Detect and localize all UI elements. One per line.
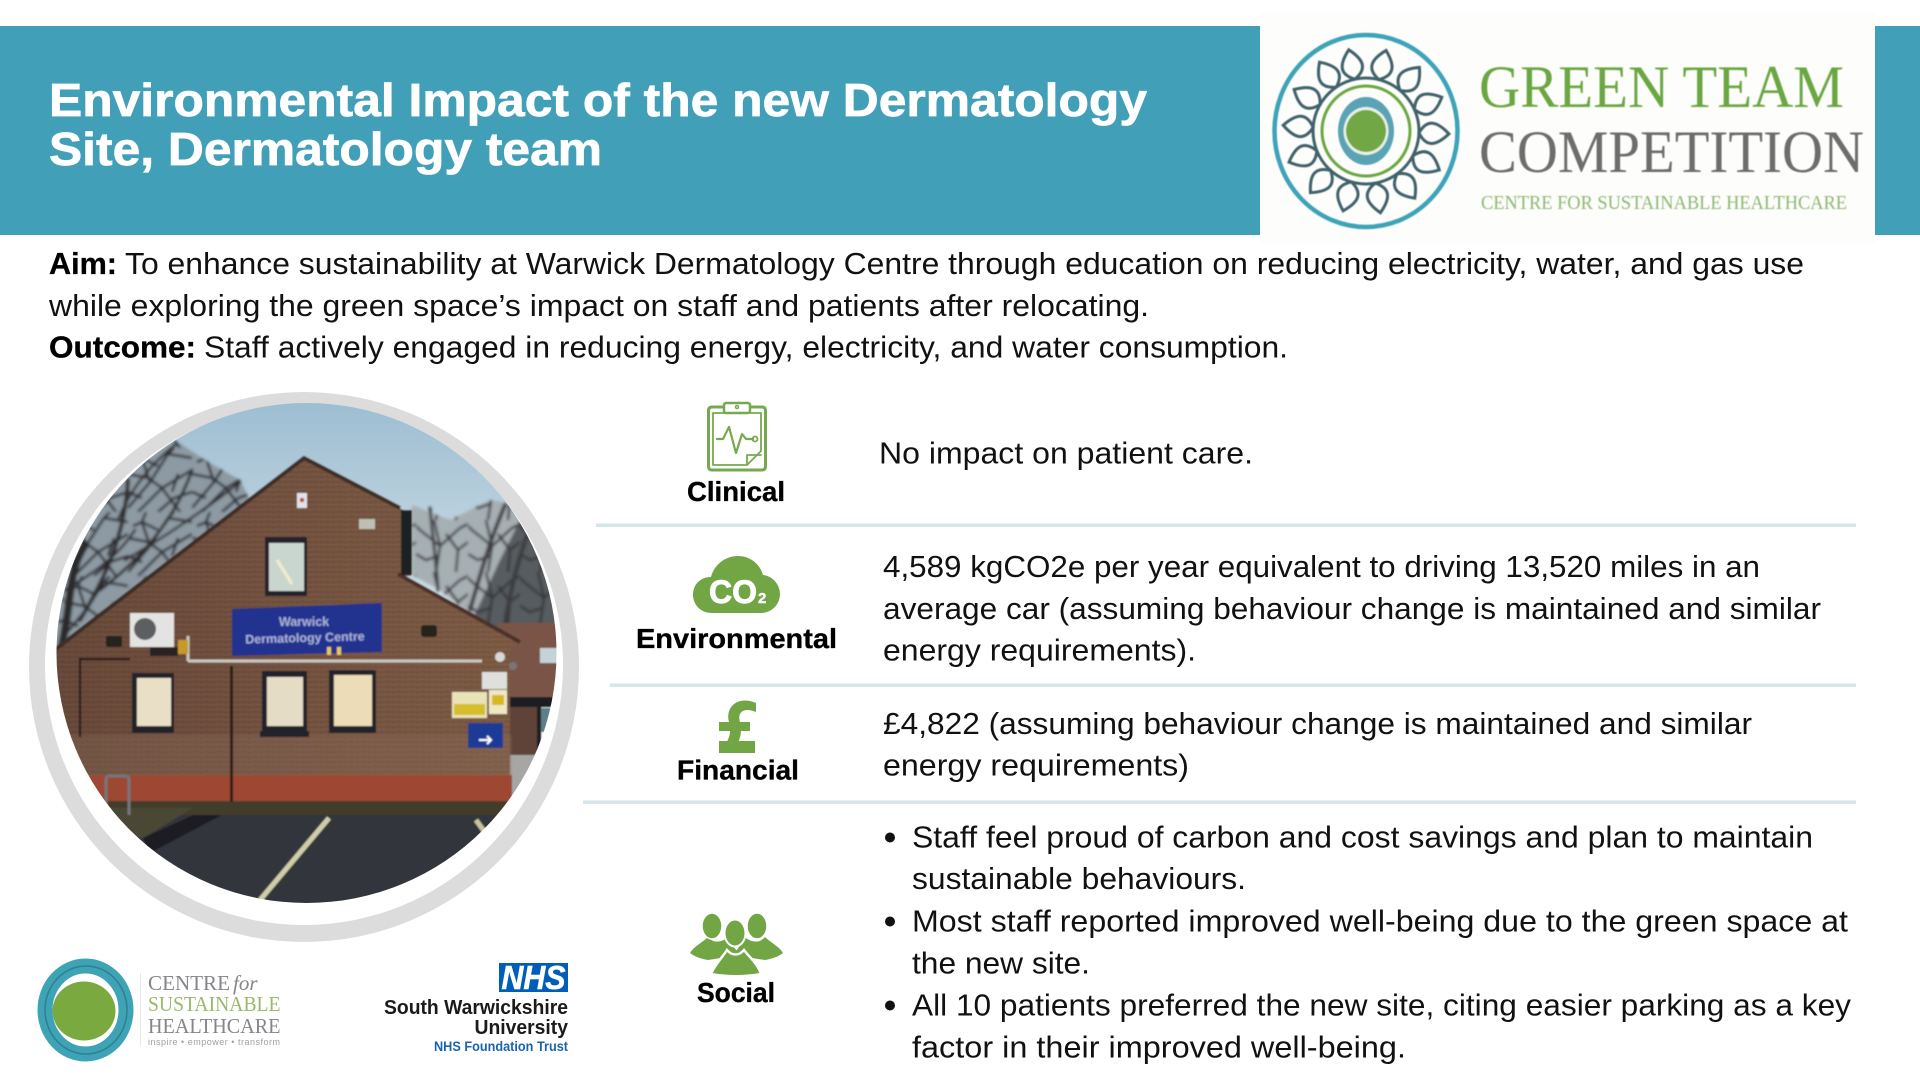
text: financial impact: energy requirements) [883, 748, 1189, 782]
label: Environmental: Environmental [636, 623, 837, 654]
logo: Centre for Sustainable Healthcare [45, 966, 280, 1054]
text: financial impact [883, 707, 1752, 782]
lower windows [132, 673, 174, 733]
bullet list: social impact: sustainable behaviours. [912, 862, 1246, 896]
AC unit [130, 613, 174, 647]
outcome: Staff actively engaged in reducing energy, electricity, and water consumption. [204, 330, 1288, 364]
intro: aim and outcome [48, 247, 1804, 364]
photo: Warwick Dermatology Centre in ring: Dermatology Centre [245, 629, 365, 647]
red band [40, 775, 512, 801]
text: financial impact: £4,822 (assuming behaviour change is maintained and similar [883, 707, 1752, 741]
logo: NHS South Warwickshire University [384, 959, 569, 1054]
aim: Aim: [49, 247, 117, 281]
photo: Warwick Dermatology Centre in ring [29, 392, 579, 942]
bullet list: social impact: the new site. [912, 946, 1090, 980]
aim: while exploring the green space’s impact on staff and patients after relocating. [48, 289, 1149, 323]
icon: clipboard with heartbeat [708, 403, 766, 470]
text: environmental impact: energy requirements). [883, 634, 1196, 668]
icon: three people [690, 913, 783, 976]
logo: Centre for Sustainable Healthcare: for [233, 971, 258, 995]
roof edges [52, 458, 400, 652]
logo: Green Team Competition: CENTRE FOR SUSTAINABLE HEALTHCARE [1481, 192, 1847, 214]
warning signs [482, 672, 507, 689]
bullet list: social impact: Most staff reported improved well-being due to the green space at [912, 904, 1849, 938]
icon: CO2 cloud: CO [709, 574, 757, 610]
label: Social: Social [697, 977, 775, 1008]
header band [0, 26, 1920, 235]
fittings [359, 519, 375, 529]
text: environmental impact: 4,589 kgCO2e per year equivalent to driving 13,520 miles in an [883, 550, 1760, 584]
text: environmental impact [883, 550, 1821, 668]
logo: Green Team Competition [1260, 12, 1875, 244]
row: social [690, 820, 1852, 1064]
photo: Warwick Dermatology Centre in ring: Warwick [279, 615, 329, 629]
title [49, 74, 1147, 175]
text: clinical impact: No impact on patient care. [879, 436, 1253, 470]
text: environmental impact: average car (assuming behaviour change is maintained and similar [883, 592, 1821, 626]
left tree [50, 440, 250, 660]
top window [265, 537, 307, 596]
logo: NHS South Warwickshire University: South Warwickshire [384, 997, 568, 1019]
aim [48, 247, 1804, 323]
building wall [40, 458, 519, 815]
row: financial [677, 701, 1752, 786]
icon: CO2 cloud [693, 556, 780, 613]
title: Site, Dermatology team [49, 123, 602, 175]
bullet list: social impact: Staff feel proud of carbon and cost savings and plan to maintain [912, 820, 1813, 854]
label: Clinical: Clinical [687, 476, 785, 507]
logo: Centre for Sustainable Healthcare: HEALTHCARE [148, 1014, 280, 1038]
rear building [498, 623, 560, 697]
logo: Centre for Sustainable Healthcare: SUSTAINABLE [148, 992, 280, 1016]
pipes [188, 660, 482, 662]
logo: Green Team Competition: COMPETITION [1479, 119, 1864, 185]
logo: NHS South Warwickshire University: NHS [502, 959, 566, 996]
title: Environmental Impact of the new Dermatology [49, 74, 1147, 126]
logo: Centre for Sustainable Healthcare: inspire • empower • transform [148, 1037, 280, 1047]
logo: Centre for Sustainable Healthcare: CENTRE [148, 971, 230, 995]
row: environmental [636, 550, 1821, 668]
logo: NHS South Warwickshire University: University [474, 1017, 569, 1039]
logo: Green Team Competition: GREEN TEAM [1479, 54, 1844, 120]
site sign [232, 603, 382, 656]
bullet list: social impact: All 10 patients preferred the new site, citing easier parking as a key [912, 988, 1852, 1022]
icon: CO2 cloud: 2 [758, 590, 766, 607]
outcome: Outcome: [49, 330, 196, 364]
aim: To enhance sustainability at Warwick Dermatology Centre through education on reducing electricity, water, and gas use [125, 247, 1804, 281]
divider lines between rows [583, 524, 1856, 804]
label: Financial: Financial [677, 754, 799, 786]
bullet list: social impact [885, 820, 1852, 1064]
row: clinical [687, 403, 1253, 507]
asphalt [138, 814, 498, 903]
icon: pound sign [719, 701, 756, 753]
right trees [412, 500, 560, 640]
logo: NHS South Warwickshire University: NHS Foundation Trust [434, 1039, 568, 1054]
bullet list: social impact: factor in their improved well-being. [912, 1030, 1406, 1064]
